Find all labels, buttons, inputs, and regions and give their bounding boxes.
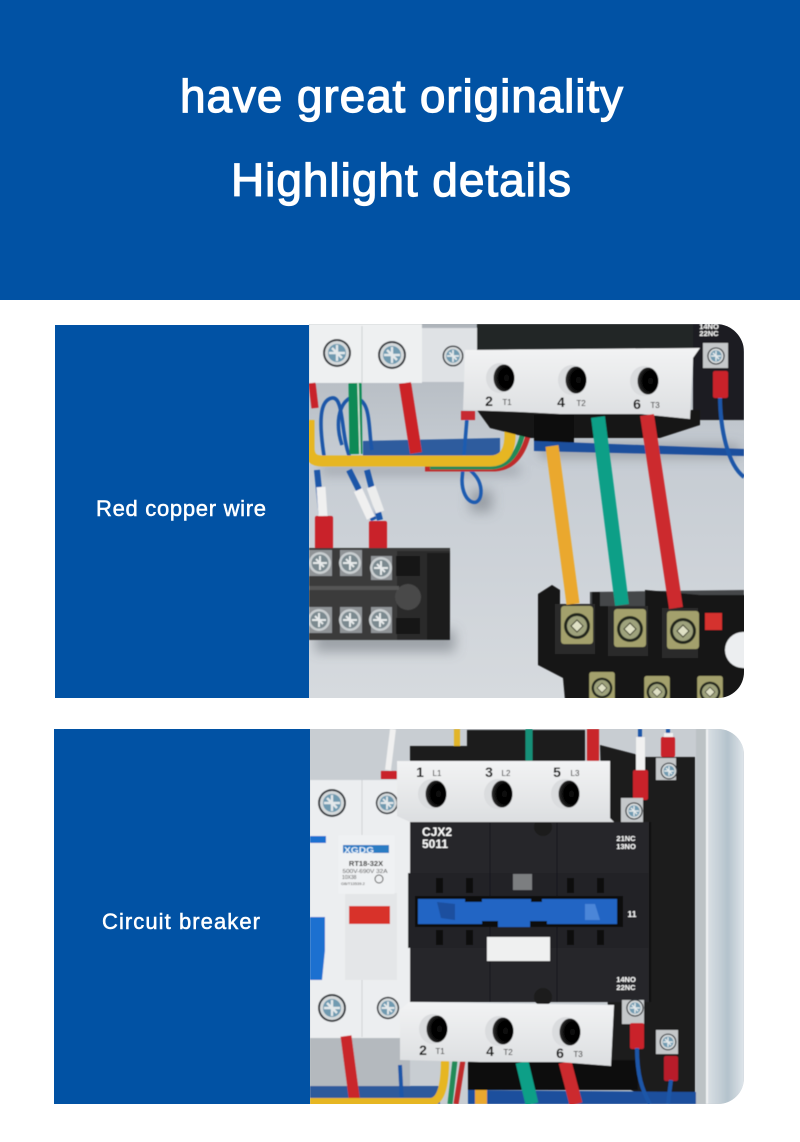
- white breakers: [309, 324, 477, 383]
- contactor markings: 21NC: [616, 834, 636, 843]
- white terminal cover: 2: [485, 393, 493, 409]
- white terminal cover: T1: [502, 398, 512, 407]
- white terminal cover: 4: [557, 394, 565, 410]
- title: [180, 70, 623, 206]
- red and green bus: [424, 436, 531, 472]
- breaker white body: [310, 780, 410, 1038]
- fuse holder: RT18-32X: [349, 859, 383, 868]
- bottom white terminal cover: T1: [435, 1047, 445, 1056]
- contactor markings: 5011: [422, 837, 448, 851]
- panel: circuit breaker: [54, 729, 744, 1104]
- top white terminal cover: [397, 761, 614, 822]
- auxiliary wires and terminals: [621, 729, 678, 1104]
- terminal block: [308, 548, 450, 640]
- top white terminal cover: L1: [433, 769, 442, 778]
- bottom white terminal cover: 2: [419, 1042, 427, 1058]
- fuse holder: 500V-690V 32A: [342, 869, 388, 875]
- right auxiliary black body: [600, 745, 695, 1104]
- top banner background: [0, 0, 800, 300]
- contactor body: [408, 818, 650, 1006]
- right red ferrule and blue wire: [713, 371, 744, 477]
- red stub wire: [312, 383, 315, 408]
- fuse holder: 10X38: [342, 875, 357, 881]
- top white terminal cover: 3: [485, 764, 493, 780]
- lower blue wires with sleeves and ferrules: [315, 470, 387, 556]
- white terminal cover: [463, 348, 700, 419]
- photo: wiring close-up: [308, 322, 761, 706]
- bottom white terminal cover: T2: [503, 1048, 513, 1057]
- overload relay: [537, 584, 744, 698]
- white terminal cover: T3: [650, 401, 660, 410]
- yellow phase wire: [552, 446, 573, 604]
- fuse holder: XGDG: [344, 846, 374, 855]
- contactor markings: 11: [628, 909, 637, 919]
- fuse holder: [340, 835, 391, 925]
- label panel: red copper wire: [55, 325, 309, 698]
- soft shadows on the panel: [315, 445, 740, 652]
- photo: contactor and fuse: [310, 729, 744, 1104]
- title line 2: Highlight details: [231, 154, 571, 206]
- black contactor: 22NC: [699, 329, 719, 338]
- white terminal cover: T2: [576, 399, 586, 408]
- green wire: [355, 383, 356, 454]
- contactor markings: 13NO: [616, 842, 636, 851]
- lower wiring: [310, 1036, 696, 1104]
- fuse holder: GB/T13539.2: [341, 881, 366, 886]
- label text: red copper wire: Red copper wire: [96, 496, 266, 521]
- green phase wire: [598, 417, 622, 605]
- bottom white terminal cover: [400, 1002, 614, 1066]
- blue bundle and loose blue wires: [321, 398, 500, 502]
- blue harness: [534, 441, 744, 456]
- top white terminal cover: L3: [571, 769, 580, 778]
- blue slider: [415, 896, 623, 927]
- white label: [487, 937, 550, 961]
- contactor markings: 14NO: [616, 975, 636, 984]
- white terminal cover: 6: [633, 396, 641, 412]
- title line 1: have great originality: [180, 70, 623, 122]
- red phase wire: [647, 415, 676, 608]
- bottom white terminal cover: T3: [573, 1050, 583, 1059]
- label text: circuit breaker: Circuit breaker: [102, 909, 260, 934]
- contactor markings: CJX2: [422, 825, 452, 839]
- top white terminal cover: L2: [502, 769, 511, 778]
- bottom white terminal cover: 6: [556, 1045, 564, 1061]
- top wires: [381, 729, 593, 779]
- bottom white terminal cover: 4: [486, 1043, 494, 1059]
- label panel: circuit breaker: [54, 729, 310, 1104]
- contactor markings: 22NC: [616, 983, 636, 992]
- yellow bus wire: [309, 420, 510, 461]
- top white terminal cover: 5: [553, 764, 561, 780]
- panel: red copper wire: [55, 322, 761, 706]
- contactor markings: [422, 825, 637, 992]
- black contactor: 14NO: [699, 322, 719, 331]
- black contactor: [477, 322, 744, 445]
- top white terminal cover: 1: [416, 764, 424, 780]
- red wire: [405, 383, 416, 453]
- right frame strips: [696, 729, 744, 1104]
